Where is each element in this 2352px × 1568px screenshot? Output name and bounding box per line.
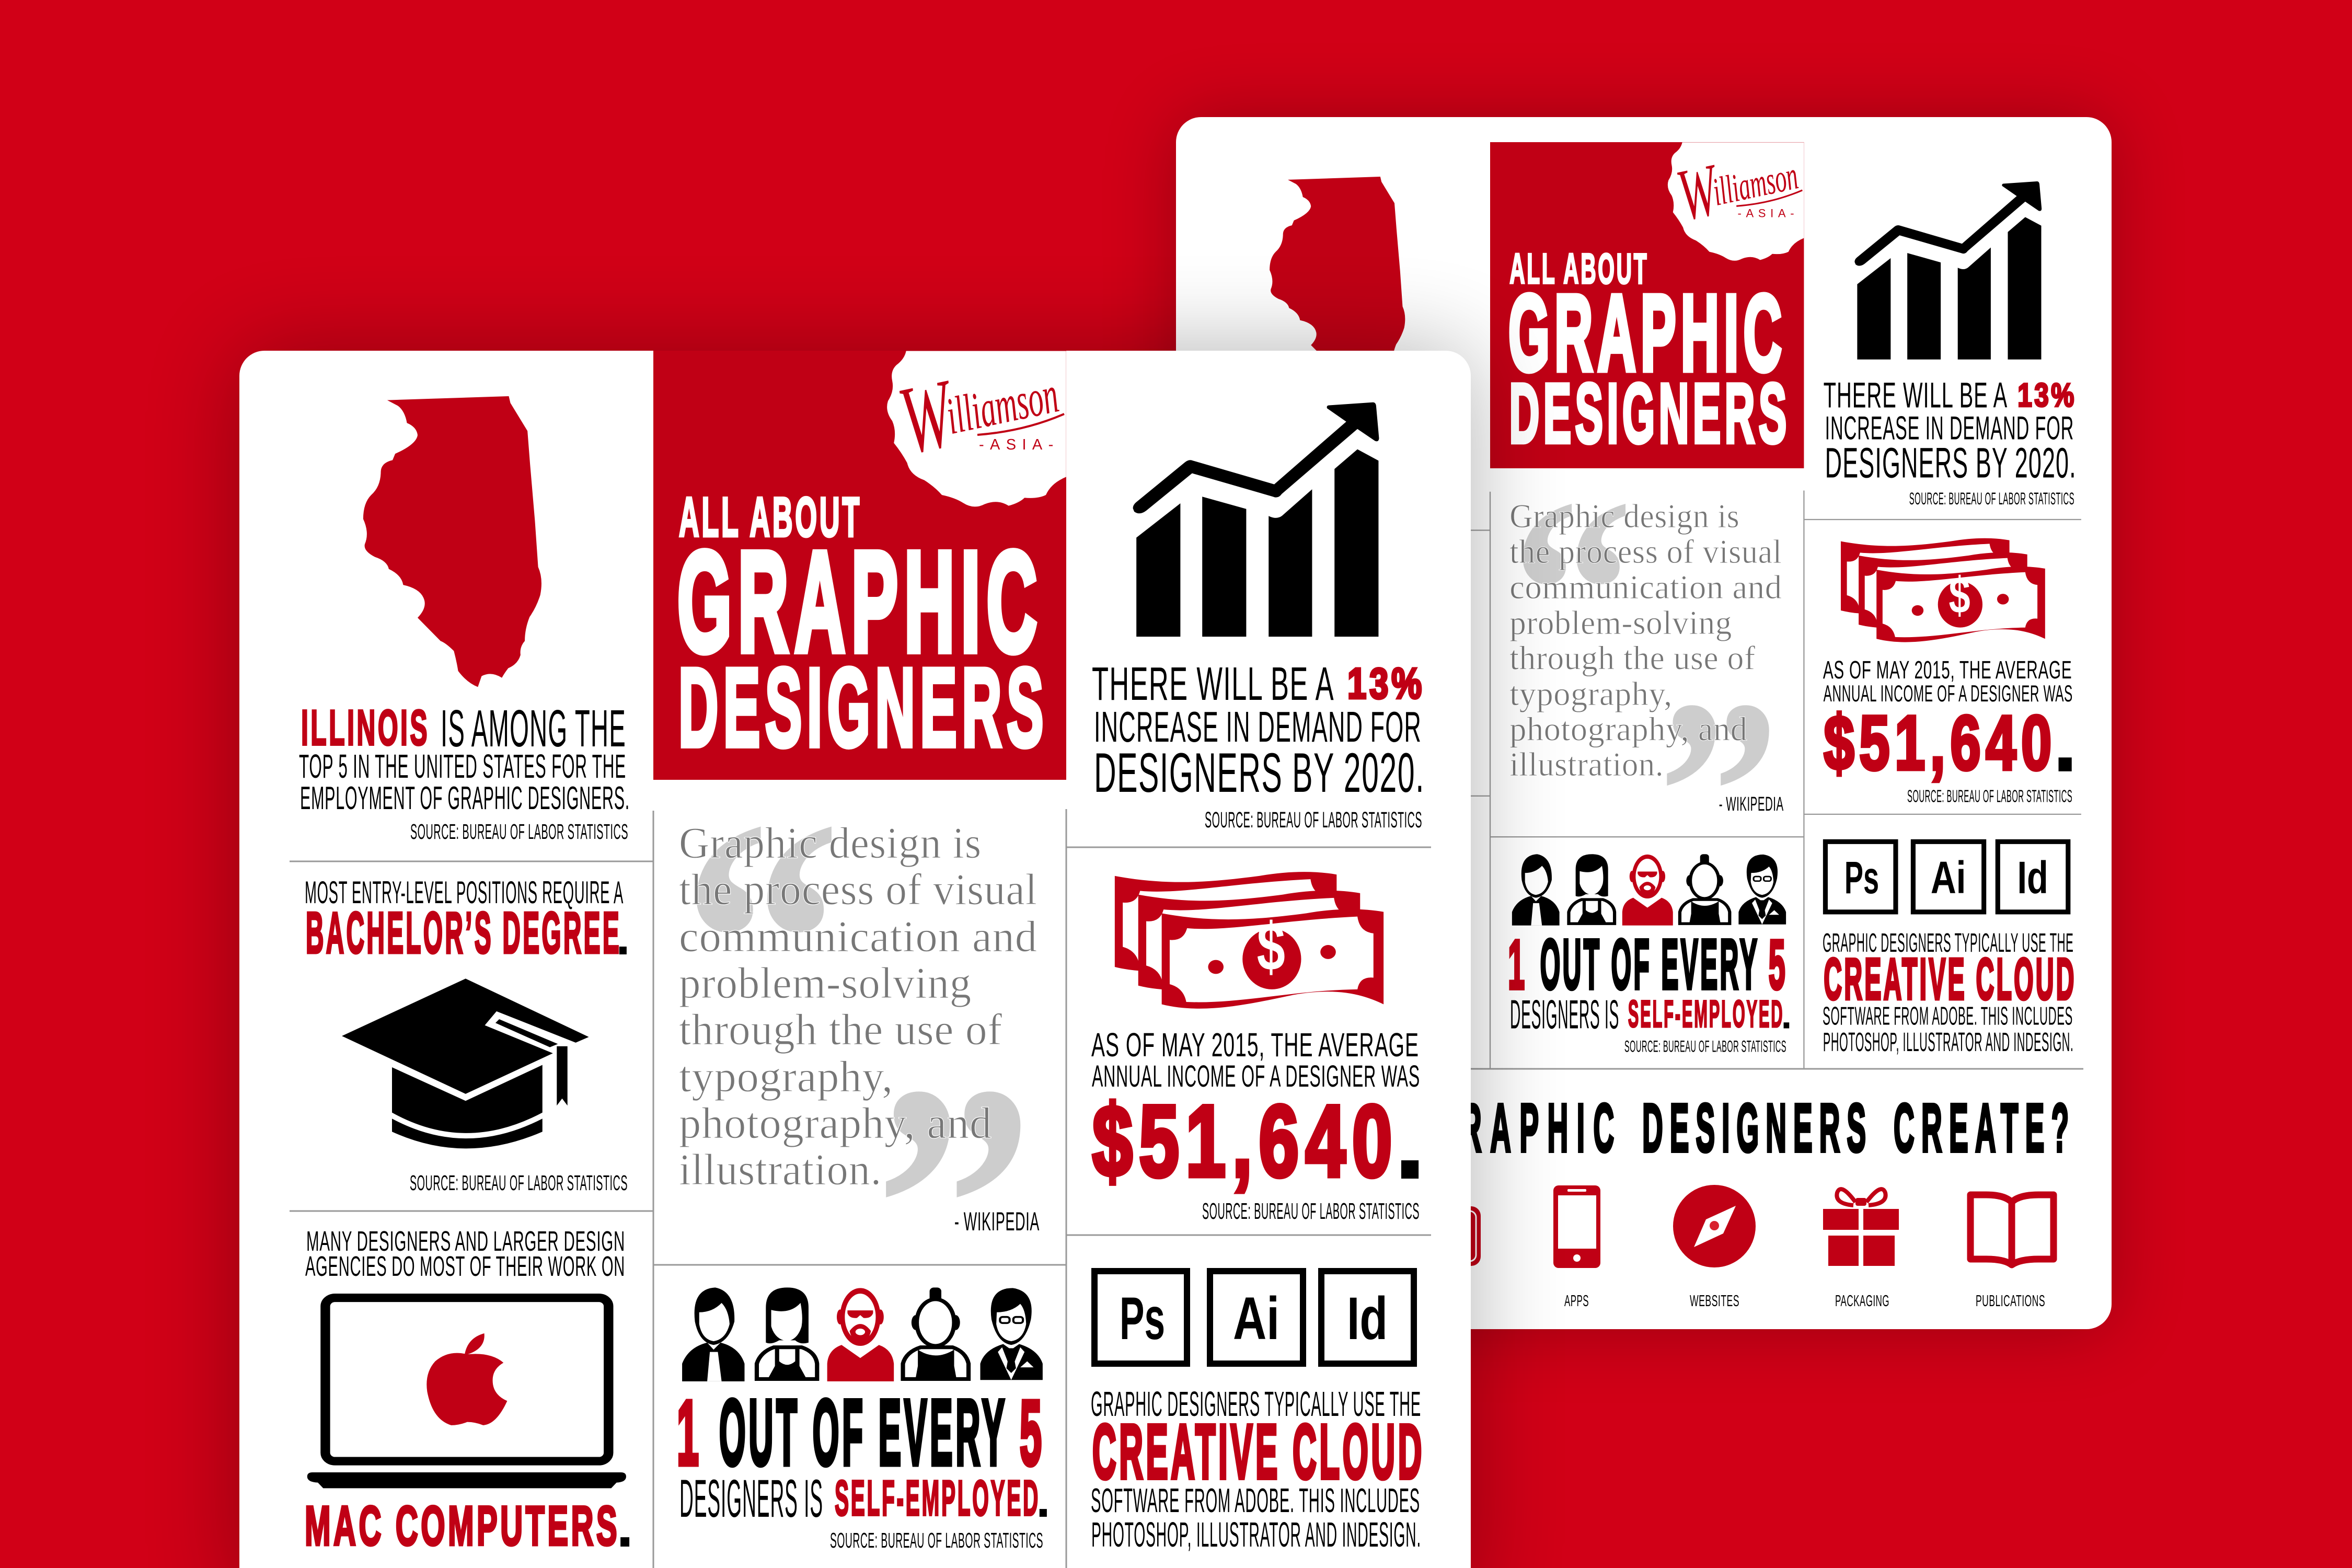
panel: front poster card: SOURCE: BUREAU OF LABOR STATISTICS bbox=[1202, 1198, 1420, 1224]
heading: what do graphic designers create bbox=[1218, 1090, 2071, 1167]
block: self-employed stat: 1 bbox=[677, 1382, 699, 1484]
block: self-employed stat bbox=[1508, 854, 1792, 1055]
block: demand stat: INCREASE IN DEMAND FOR bbox=[1094, 702, 1422, 751]
block: demand stat: DESIGNERS BY 2020. bbox=[1825, 439, 2077, 487]
block: creative cloud: Ps bbox=[1120, 1285, 1165, 1352]
block: income stat: ANNUAL INCOME OF A DESIGNER WAS bbox=[1824, 681, 2073, 707]
title: ALL ABOUT bbox=[1509, 245, 1648, 293]
block: quote: Graphic design is bbox=[1509, 497, 1739, 535]
block: self-employed stat: . bbox=[1036, 1470, 1051, 1528]
poster content at reduced scale: OUT OF EVERY bbox=[1540, 925, 1759, 1004]
panel: front poster card: SOURCE: BUREAU OF LABOR STATISTICS bbox=[410, 820, 628, 844]
icon: book bbox=[1970, 1195, 2054, 1265]
panel: front poster card: TOP 5 IN THE UNITED STATES FOR THE bbox=[299, 747, 626, 785]
block: quote: problem-solving bbox=[679, 959, 972, 1008]
heading: what do graphic designers create: WHAT DO GRAPHIC bbox=[1218, 1090, 1617, 1167]
front card shadow bbox=[239, 351, 1471, 1568]
block: Illinois stat bbox=[299, 396, 630, 844]
block: creative cloud: Ai bbox=[1233, 1285, 1279, 1352]
icon labels: PUBLICATIONS bbox=[1976, 1292, 2045, 1310]
block: creative cloud: Ps bbox=[1844, 852, 1879, 903]
title bbox=[677, 486, 1048, 770]
block: demand stat: THERE WILL BE A bbox=[1824, 376, 2008, 416]
block: quote: illustration. bbox=[679, 1145, 882, 1194]
block: demand stat: DESIGNERS BY 2020. bbox=[1094, 741, 1425, 804]
text: PHOTOSHOP, ILLUSTRATOR AND INDESIGN. bbox=[1091, 1515, 1421, 1554]
block: self-employed stat: 5 bbox=[1769, 926, 1785, 1004]
block: quote bbox=[679, 747, 1040, 1400]
text: GRAPHIC DESIGNERS TYPICALLY USE THE bbox=[1091, 1385, 1421, 1424]
title bbox=[1508, 245, 1791, 461]
panel: front poster card bbox=[239, 337, 1471, 1568]
block: Illinois stat: ILLINOIS bbox=[301, 700, 430, 756]
block: self-employed stat: . bbox=[1781, 993, 1792, 1037]
block: quote: - WIKIPEDIA bbox=[954, 1207, 1040, 1236]
header panel: DESIGNERS bbox=[1509, 366, 1791, 461]
icon labels bbox=[1564, 1292, 2045, 1310]
block: quote: - WIKIPEDIA bbox=[1719, 793, 1784, 815]
block: quote bbox=[1509, 444, 1784, 940]
icon: phone bbox=[1553, 1185, 1600, 1268]
block: income stat: AS OF MAY 2015, THE AVERAGE bbox=[1823, 656, 2072, 684]
block: creative cloud: Id bbox=[2017, 852, 2048, 903]
block: income stat: $ bbox=[1949, 566, 1971, 624]
block: quote: ” bbox=[1658, 645, 1780, 940]
poster content at reduced scale bbox=[1214, 132, 2081, 1069]
block: degree stat: . bbox=[616, 907, 630, 966]
block: quote: the process of visual bbox=[679, 865, 1037, 914]
block: income stat: ANNUAL INCOME OF A DESIGNER WAS bbox=[1092, 1059, 1420, 1093]
block: quote: ” bbox=[874, 1012, 1035, 1400]
icon: compass bbox=[1673, 1185, 1756, 1267]
logo: illiamson bbox=[941, 365, 1063, 445]
heading: what do graphic designers create: DESIGNERS bbox=[1642, 1090, 1869, 1167]
block: self-employed stat: DESIGNERS IS bbox=[679, 1469, 823, 1528]
logo: -ASIA- bbox=[979, 436, 1054, 453]
logo: W bbox=[891, 359, 966, 475]
panel: front poster card: SELF-EMPLOYED bbox=[835, 1470, 1040, 1526]
block: income stat: . bbox=[2052, 687, 2078, 791]
block: income stat: . bbox=[1393, 1067, 1427, 1205]
block: quote: “ bbox=[1511, 444, 1633, 739]
logo: W bbox=[1670, 148, 1728, 236]
block: mac stat bbox=[305, 1226, 633, 1560]
block: income stat bbox=[1091, 872, 1427, 1224]
block: income stat bbox=[1823, 538, 2078, 806]
title: ALL ABOUT bbox=[679, 486, 862, 548]
block: demand stat: THERE WILL BE A bbox=[1092, 658, 1334, 710]
poster content at reduced scale: SOURCE: BUREAU OF LABOR STATISTICS bbox=[1624, 1037, 1786, 1055]
text: CREATIVE CLOUD bbox=[1092, 1409, 1425, 1495]
block: degree stat bbox=[305, 875, 630, 1195]
block: creative cloud: Ai bbox=[1931, 852, 1966, 903]
block: self-employed stat: 5 bbox=[1020, 1382, 1042, 1484]
block: quote: through the use of bbox=[1509, 639, 1756, 676]
logo bbox=[1670, 132, 1805, 236]
block: quote: communication and bbox=[1509, 568, 1782, 606]
block: quote: typography, bbox=[1509, 675, 1673, 712]
panel: front poster card: EMPLOYMENT OF GRAPHIC DESIGNERS. bbox=[300, 780, 630, 816]
icon labels: APPS bbox=[1564, 1292, 1589, 1310]
back card shadow bbox=[1176, 117, 2112, 1329]
block: demand stat bbox=[1092, 402, 1425, 833]
block: mac stat: . bbox=[616, 1490, 633, 1560]
header panel: GRAPHIC bbox=[677, 522, 1043, 681]
header panel: DESIGNERS bbox=[678, 645, 1048, 770]
block: self-employed stat: DESIGNERS IS bbox=[1510, 993, 1619, 1037]
block: creative cloud bbox=[1091, 1271, 1425, 1554]
icon labels: PACKAGING bbox=[1835, 1292, 1889, 1310]
block: quote: photography, and bbox=[679, 1099, 992, 1148]
panel: back poster card bbox=[1176, 117, 2112, 1329]
block: income stat: $51,640 bbox=[1092, 1085, 1399, 1198]
block: quote: the process of visual bbox=[1509, 533, 1782, 570]
panel: front poster card: IS AMONG THE bbox=[441, 699, 626, 758]
panel: front poster card: MOST ENTRY-LEVEL POSITIONS REQUIRE A bbox=[305, 875, 624, 910]
panel: front poster card: SOURCE: BUREAU OF LABOR STATISTICS bbox=[1205, 808, 1422, 833]
block: quote: through the use of bbox=[679, 1005, 1002, 1054]
block: quote: photography, and bbox=[1509, 710, 1747, 748]
block: self-employed stat: 1 bbox=[1508, 926, 1525, 1004]
block: mac stat: AGENCIES DO MOST OF THEIR WORK ON bbox=[305, 1251, 625, 1282]
block: demand stat: 13% bbox=[1347, 659, 1425, 708]
block: quote: typography, bbox=[679, 1052, 893, 1101]
block: creative cloud: Id bbox=[1347, 1285, 1388, 1352]
block: quote: illustration. bbox=[1509, 745, 1664, 783]
block: creative cloud bbox=[1823, 841, 2077, 1057]
block: quote: Graphic design is bbox=[679, 818, 982, 868]
logo: illiamson bbox=[1709, 154, 1802, 214]
panel: front poster card: SOURCE: BUREAU OF LABOR STATISTICS bbox=[830, 1528, 1043, 1552]
block: quote: “ bbox=[681, 747, 842, 1135]
header panel bbox=[653, 337, 1067, 780]
logo: -ASIA- bbox=[1737, 207, 1794, 220]
panel: back poster card: SOURCE: BUREAU OF LABOR STATISTICS bbox=[1909, 489, 2074, 508]
block: quote: communication and bbox=[679, 912, 1037, 961]
icon labels: WEBSITES bbox=[1690, 1292, 1739, 1310]
panel: front poster card: OUT OF EVERY bbox=[719, 1380, 1008, 1484]
panel: back poster card: SOURCE: BUREAU OF LABOR STATISTICS bbox=[1907, 787, 2072, 806]
panel: front poster card: BACHELOR’S DEGREE bbox=[306, 901, 621, 965]
icon: Illinois map bbox=[1270, 177, 1405, 398]
logo bbox=[891, 337, 1067, 475]
header panel bbox=[1490, 132, 1805, 468]
block: income stat: $ bbox=[1257, 909, 1286, 985]
block: mac stat: MANY DESIGNERS AND LARGER DESIGN bbox=[306, 1226, 625, 1257]
heading: what do graphic designers create: CREATE? bbox=[1894, 1090, 2071, 1167]
block: demand stat bbox=[1824, 181, 2077, 508]
header panel: GRAPHIC bbox=[1508, 272, 1786, 393]
poster content at reduced scale: SELF-EMPLOYED bbox=[1628, 993, 1784, 1035]
block: income stat: $51,640 bbox=[1824, 700, 2057, 786]
block: quote: problem-solving bbox=[1509, 604, 1732, 641]
panel: front poster card: SOURCE: BUREAU OF LABOR STATISTICS bbox=[410, 1171, 628, 1195]
icon: gift bbox=[1823, 1189, 1899, 1266]
block: mac stat: MAC COMPUTERS bbox=[305, 1494, 620, 1557]
icon: partial device bbox=[1432, 1206, 1481, 1266]
block: self-employed stat bbox=[677, 1287, 1051, 1552]
block: demand stat: INCREASE IN DEMAND FOR bbox=[1825, 410, 2074, 446]
block: income stat: AS OF MAY 2015, THE AVERAGE bbox=[1091, 1026, 1419, 1064]
block: demand stat: 13% bbox=[2017, 377, 2077, 413]
panel: front poster card: SOFTWARE FROM ADOBE. THIS INCLUDES bbox=[1091, 1481, 1420, 1519]
